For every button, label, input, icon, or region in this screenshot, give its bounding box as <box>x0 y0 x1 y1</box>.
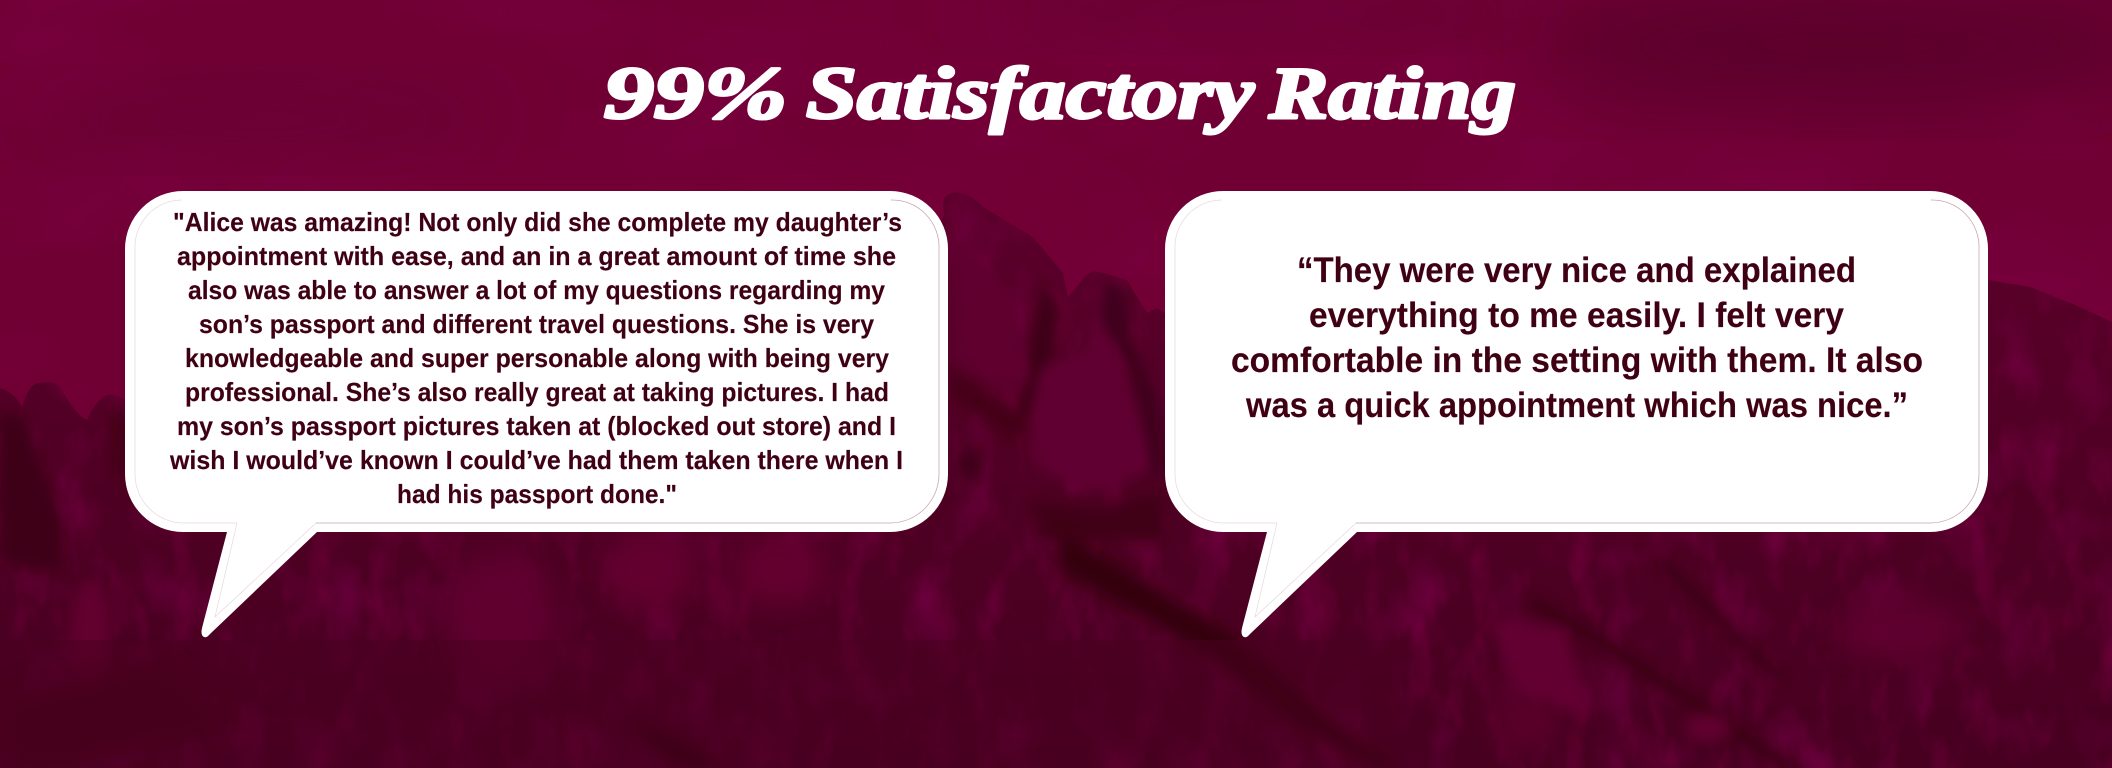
quote text: professional. She’s also really great at taking pictures. I had <box>185 377 889 407</box>
title: Satisfactory <box>806 53 1255 135</box>
quote text: had his passport done." <box>397 479 677 509</box>
quote text: comfortable in the setting with them. It also <box>1231 341 1923 380</box>
quote text: my son’s passport pictures taken at (blocked out store) and I <box>177 411 896 441</box>
quote text: “They were very nice and explained <box>1297 251 1856 290</box>
bubble shape <box>1165 191 1988 637</box>
title: 99% <box>604 53 787 135</box>
quote text: also was able to answer a lot of my questions regarding my <box>188 275 886 305</box>
quote text: knowledgeable and super personable along with being very <box>185 343 890 373</box>
quote text: was a quick appointment which was nice.” <box>1245 386 1908 425</box>
quote text: appointment with ease, and an in a great amount of time she <box>177 241 896 271</box>
quote text <box>1231 251 1923 425</box>
panel: left testimonial speech bubble <box>125 191 948 637</box>
quote text <box>169 207 903 509</box>
title: Rating <box>1268 53 1516 135</box>
panel: right testimonial speech bubble <box>1165 191 1988 637</box>
bubble shape <box>125 191 948 637</box>
quote text: son’s passport and different travel questions. She is very <box>199 309 875 339</box>
quote text: everything to me easily. I felt very <box>1309 296 1844 335</box>
quote text: wish I would’ve known I could’ve had them taken there when I <box>169 445 903 475</box>
quote text: "Alice was amazing! Not only did she complete my daughter’s <box>173 207 902 237</box>
mountains <box>0 192 2112 768</box>
title <box>604 53 1516 135</box>
